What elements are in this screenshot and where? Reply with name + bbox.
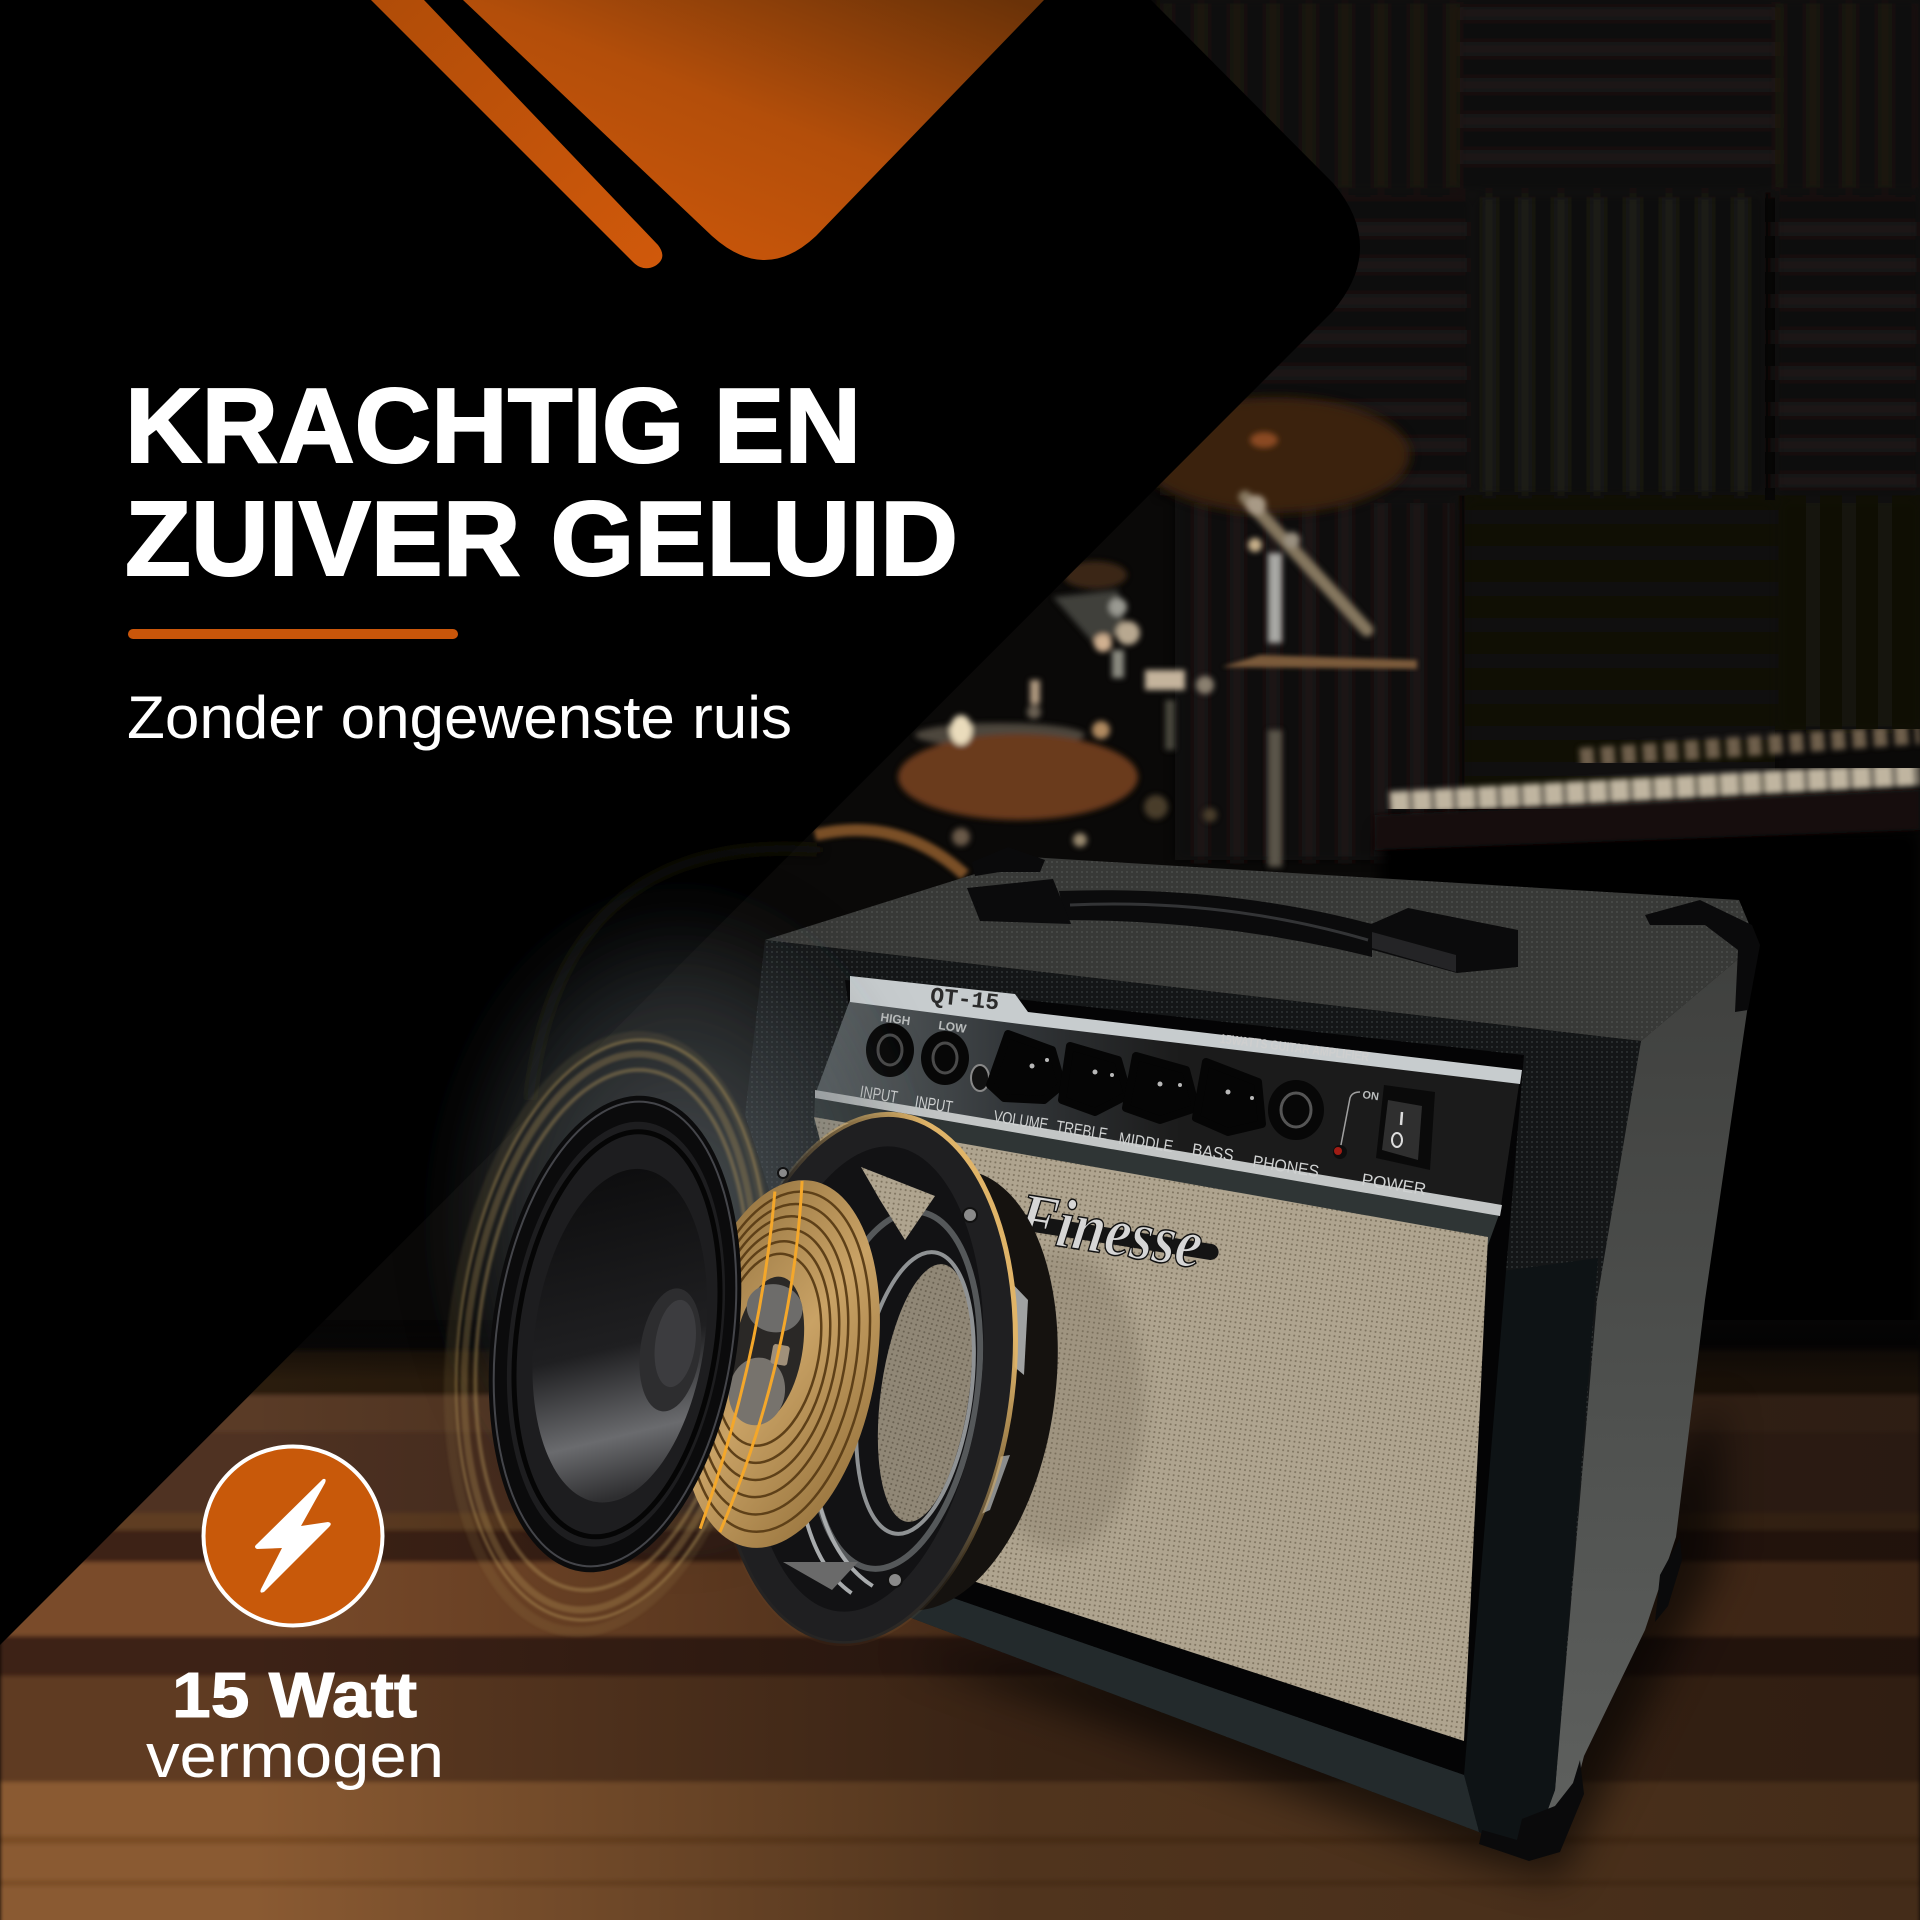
power caption: vermogen (146, 1722, 444, 1791)
amp: gray band under panel (814, 1095, 1500, 1245)
drum: top cymbal (1140, 397, 1410, 513)
floor horizontal darkening (0, 1345, 1920, 1920)
amp: grille ghost circle (975, 1250, 1145, 1550)
background: blurred keyboard (1375, 734, 1920, 850)
title (125, 367, 958, 598)
speaker: cone and surround (460, 1079, 770, 1589)
amp: control panel (815, 1000, 1520, 1212)
speaker: haze glow (440, 890, 920, 1550)
icon: lightning bolt (255, 1479, 331, 1593)
amp: metal corners (972, 847, 1760, 1861)
amp: tan speaker grille (814, 1117, 1488, 1741)
amp: control labels: PHONES (1251, 1152, 1320, 1181)
amp: jack labels top: LOW (938, 1018, 968, 1036)
keyboard: rear keys (1580, 734, 1920, 758)
basket: windows (861, 1167, 935, 1240)
background: blurred drum kit (815, 397, 1417, 875)
amp: right side face (1479, 943, 1757, 1861)
amp: top face (765, 857, 1757, 1041)
amp: control labels: INPUT (914, 1092, 954, 1117)
drum: tom and hardware (952, 561, 1217, 847)
amp: jack labels top: HIGH (880, 1010, 911, 1028)
amp: power switch (1376, 1085, 1435, 1170)
amp: model label: QT-15 (929, 983, 1000, 1017)
background: studio wall with foam panels (0, 0, 1920, 1400)
amp: control knobs (990, 1034, 1262, 1132)
orange title underline (128, 629, 458, 639)
amp: Finesse logo: Finesse (1012, 1179, 1208, 1284)
amp: jack labels top: ON (1362, 1089, 1380, 1103)
basket: grille seen through the center (863, 1258, 987, 1528)
title: KRACHTIG EN (125, 367, 861, 485)
amp: control labels: POWER (1360, 1170, 1427, 1199)
amp: control labels: TREBLE (1055, 1117, 1109, 1144)
amp: front frame (745, 940, 1641, 1861)
title: ZUIVER GELUID (125, 480, 958, 598)
black diagonal panel (0, 0, 1360, 1645)
amp: control labels: BASS (1191, 1140, 1235, 1165)
amp: carrying handle (967, 879, 1518, 973)
basket: silver inner rings (772, 1199, 1001, 1607)
amp: knob highlights (1030, 1058, 1254, 1100)
speaker exploded view (413, 890, 1085, 1661)
amp: power LED (1333, 1092, 1360, 1159)
keyboard: slab (1375, 790, 1920, 850)
floor fade into wall (0, 1320, 1920, 1380)
basket: outer body (785, 1153, 1085, 1627)
amp: input jacks (866, 1023, 1324, 1140)
amp: top chrome strip (850, 976, 1522, 1084)
amplifier (745, 847, 1760, 1861)
drum: copper snare and highlight (898, 715, 1138, 820)
orange diagonal stripe (371, 0, 662, 268)
soft amp shadow on floor (900, 1400, 1720, 1880)
amp: lower chrome strip (815, 1090, 1502, 1216)
drum: bass rim (815, 830, 965, 875)
amp: control labels (859, 1082, 1427, 1199)
orange rounded diamond at top (463, 0, 1044, 260)
amp: model description: 15WATTS GUITAR AMPLIFIER (1219, 1031, 1370, 1064)
drum: stand arm and uprights (1245, 432, 1367, 867)
speaker: basket behind the ring (711, 1127, 1085, 1631)
power icon (204, 1446, 382, 1626)
wattage label: 15 Watt (172, 1659, 417, 1731)
subtitle: Zonder ongewenste ruis (127, 684, 792, 751)
faint drum arc inside the black panel (530, 849, 820, 1100)
keyboard: front keys (1390, 774, 1920, 803)
speaker: ring gold rim (688, 1097, 1044, 1661)
shadow band below keyboard (1380, 830, 1920, 1370)
amp: opening shadow (845, 980, 1524, 1775)
amp: control labels: VOLUME (992, 1107, 1050, 1134)
amp: bottom rail (906, 1590, 1479, 1832)
speaker: ring screws (778, 1168, 977, 1587)
basket: dark interior (711, 1127, 1015, 1631)
amp: jack labels top (880, 1010, 1380, 1103)
amp: control labels: MIDDLE (1117, 1129, 1175, 1156)
speaker: mounting ring (706, 1115, 1026, 1643)
background: wooden floor (0, 1350, 1920, 1920)
amp: control labels: INPUT (859, 1082, 899, 1107)
speaker: golden sound rings (413, 1015, 803, 1653)
speaker: golden coil (653, 1164, 907, 1564)
drum: hi-hat (1222, 655, 1417, 669)
amp: lower right black stile (1464, 1258, 1598, 1861)
